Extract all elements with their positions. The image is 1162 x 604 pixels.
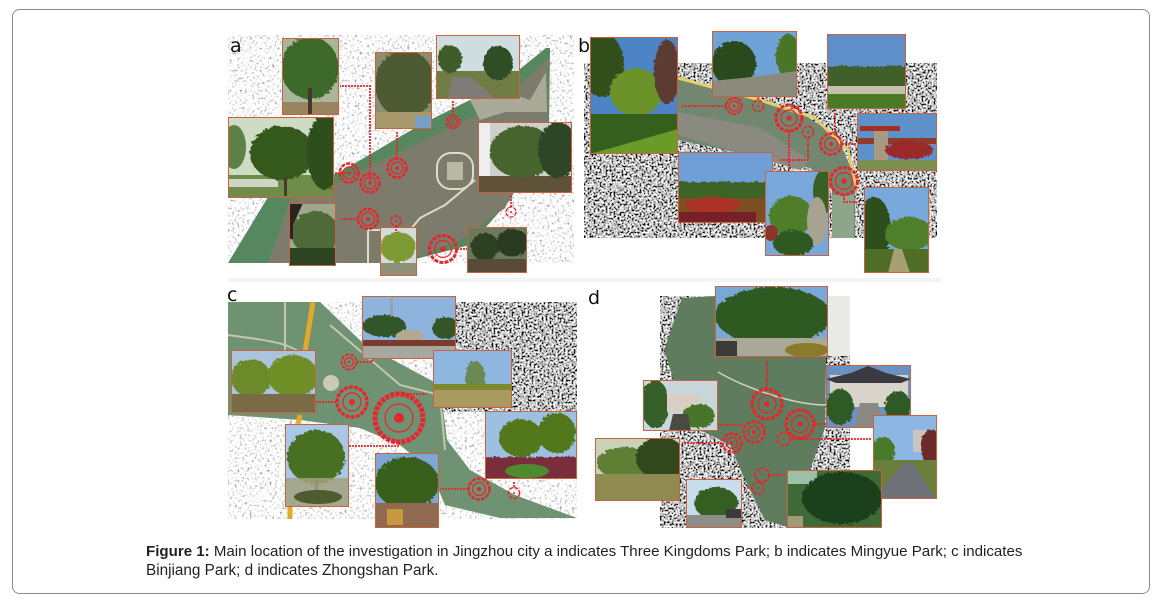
- photo b3: [827, 34, 906, 109]
- letter c: c: [227, 284, 237, 306]
- photo c4: [485, 411, 577, 479]
- photo d6: [686, 479, 742, 528]
- photo c6: [375, 453, 439, 528]
- photo b2: [712, 31, 797, 97]
- photo a1: [282, 38, 339, 115]
- map b: [584, 63, 937, 238]
- photo a3: [375, 52, 432, 129]
- photo c3: [433, 350, 512, 408]
- photo b7: [864, 187, 929, 273]
- survey targets a: [335, 86, 516, 262]
- photo d2: [826, 365, 911, 428]
- map d: [660, 296, 874, 528]
- letter b: b: [578, 35, 590, 57]
- photo a7: [380, 227, 417, 276]
- photo d4: [873, 415, 937, 499]
- figure caption: Figure 1: Main location of the investigation in Jingzhou city a indicates Three Kingdoms Park; b indicates Mingyue Park; c indicates: [146, 543, 1022, 560]
- letter a: a: [230, 35, 242, 57]
- photo d3: [643, 380, 718, 431]
- photo a5: [478, 122, 572, 193]
- photo b5: [678, 152, 773, 223]
- photo c1: [362, 296, 456, 359]
- panel d: Zhongshan Park: [588, 286, 941, 528]
- photo b1: [590, 37, 678, 154]
- photo c5: [285, 424, 349, 507]
- photo c2: [231, 350, 316, 413]
- panel a: Three Kingdoms Park: [222, 35, 578, 276]
- panel c: Binjiang Park: [227, 284, 577, 528]
- map c: [228, 302, 577, 519]
- photo a4: [436, 35, 520, 99]
- photo d5: [595, 438, 680, 501]
- survey targets b: [682, 97, 860, 202]
- letter d: d: [588, 287, 600, 309]
- photo a6: [289, 203, 336, 266]
- photo b6: [765, 171, 829, 256]
- survey targets c: [316, 354, 520, 500]
- map a: [228, 35, 574, 263]
- photo b4: [857, 113, 937, 171]
- figure caption: [146, 543, 1022, 579]
- figure caption: Binjiang Park; d indicates Zhongshan Park.: [146, 562, 439, 579]
- photo a8: [467, 227, 527, 273]
- photo a2: [228, 117, 334, 198]
- photo d7: [787, 470, 882, 528]
- panel b: Mingyue Park: [578, 31, 937, 273]
- photo d1: [715, 286, 828, 357]
- survey targets d: [682, 360, 871, 494]
